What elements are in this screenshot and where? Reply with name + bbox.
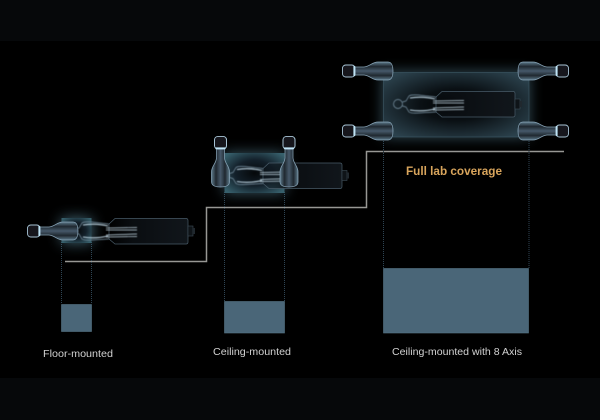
heading: full lab coverage: Full lab coverage bbox=[406, 164, 502, 178]
label: Ceiling-mounted with 8 Axis bbox=[392, 346, 522, 358]
label: Floor-mounted bbox=[43, 348, 113, 360]
column: ceiling-mounted with 8 axis bbox=[342, 62, 568, 358]
column: floor-mounted bbox=[28, 218, 195, 360]
coverage bar bbox=[224, 302, 284, 333]
robot arms bbox=[212, 136, 298, 187]
column: ceiling-mounted bbox=[212, 136, 349, 358]
coverage glow bbox=[61, 218, 92, 243]
coverage bar bbox=[62, 304, 92, 332]
coverage glow bbox=[224, 153, 285, 193]
dotted guide lines bbox=[62, 242, 92, 304]
robot: patient on table bbox=[394, 92, 522, 117]
robot: patient on table bbox=[66, 218, 195, 244]
stepped coverage line bbox=[65, 152, 564, 262]
coverage bar bbox=[384, 268, 528, 333]
dotted guide lines bbox=[384, 137, 529, 268]
coverage glow bbox=[383, 72, 529, 137]
robot: patient on table bbox=[220, 163, 349, 188]
dotted guide lines bbox=[224, 192, 284, 301]
robot arms bbox=[342, 62, 568, 140]
robot arm bbox=[28, 222, 78, 240]
label: Ceiling-mounted bbox=[213, 346, 291, 358]
